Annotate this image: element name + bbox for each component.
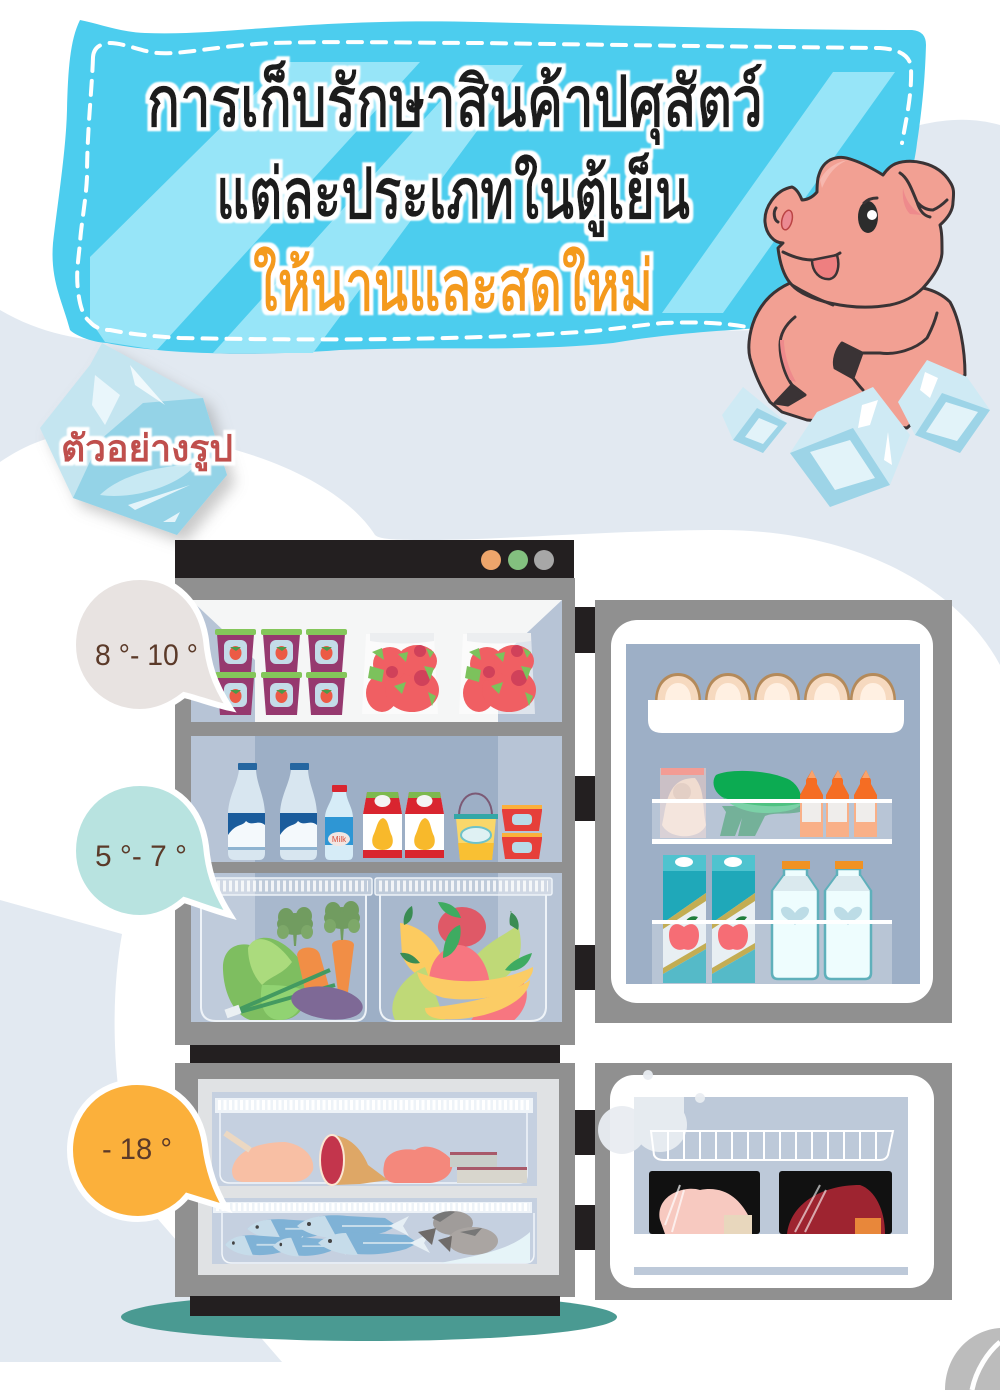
yogurt bucket (454, 794, 498, 860)
top shelf (191, 600, 562, 722)
steak (383, 1147, 453, 1183)
upper door (595, 600, 952, 1023)
small milk bottle: Milk (332, 835, 347, 844)
fridge main compartment (175, 540, 575, 1045)
temperature bubble: -18 (70, 1082, 226, 1219)
ice cube label (40, 343, 233, 535)
temperature bubble: 8-10 (73, 577, 230, 712)
pig body (749, 283, 965, 428)
title text (147, 61, 763, 325)
temperature bubble: 5-7: 5 °- 7 ° (95, 840, 187, 873)
fridge connector (190, 1045, 560, 1063)
label ice cube (40, 343, 227, 535)
juice cartons (363, 792, 444, 858)
fruit (392, 902, 533, 1022)
eggs (655, 673, 896, 701)
floor shadow (121, 1293, 617, 1341)
title text: การเก็บรักษาสินค้าปศุสัตว์ (147, 61, 763, 145)
pig mascot (749, 157, 965, 428)
corner logo (945, 1328, 1000, 1390)
pig head (765, 157, 954, 307)
basket (651, 1131, 893, 1160)
fridge foot (190, 1296, 560, 1316)
apple juice cartons (663, 855, 755, 983)
milk bottles (228, 763, 317, 860)
freezer drawer: meat (215, 1098, 533, 1185)
grey fish (418, 1211, 498, 1255)
beef tray (779, 1171, 892, 1234)
frost (598, 1070, 705, 1154)
hinges (574, 607, 595, 1250)
freezer compartment (175, 1063, 575, 1297)
temperature bubble: -18: - 18 ° (102, 1133, 172, 1166)
freezer drawer: fish (213, 1202, 534, 1263)
ice cube: medium (898, 360, 990, 453)
banner stripes (90, 62, 895, 353)
drawer right (375, 878, 552, 1021)
vegetables (223, 901, 365, 1024)
red tubs (502, 805, 542, 859)
title banner (53, 20, 926, 354)
crisper drawers (191, 873, 562, 1024)
small milk bottle (325, 785, 353, 860)
blue fish (225, 1215, 430, 1256)
orange bottles (800, 770, 877, 837)
middle shelf (191, 736, 562, 862)
pig tongue (812, 255, 838, 279)
title text: แต่ละประเภทในตู้เย็น (216, 153, 690, 237)
ice cube: large (790, 387, 910, 507)
egg tray (648, 700, 904, 733)
drawer left (201, 878, 372, 1021)
temperature bubble: 5-7 (73, 783, 230, 918)
label text: ตัวอย่างรูป (61, 428, 233, 471)
milk bottles (772, 861, 871, 979)
door shelf 1 (652, 799, 892, 844)
title text: ให้นานและสดใหม่ (253, 246, 653, 325)
ice cube: small (722, 387, 787, 453)
bacon packs (450, 1152, 497, 1167)
meat bag (660, 768, 706, 838)
yogurt cups (215, 629, 347, 715)
strawberries (362, 633, 536, 714)
chicken (232, 1142, 313, 1182)
chicken tray (649, 1171, 760, 1234)
ham (332, 1135, 388, 1185)
control bar (175, 540, 574, 579)
broccoli (714, 771, 801, 836)
temperature bubble: 8-10: 8 °- 10 ° (95, 639, 198, 672)
lower door (595, 1063, 952, 1300)
door shelf 2 backing (652, 922, 892, 984)
